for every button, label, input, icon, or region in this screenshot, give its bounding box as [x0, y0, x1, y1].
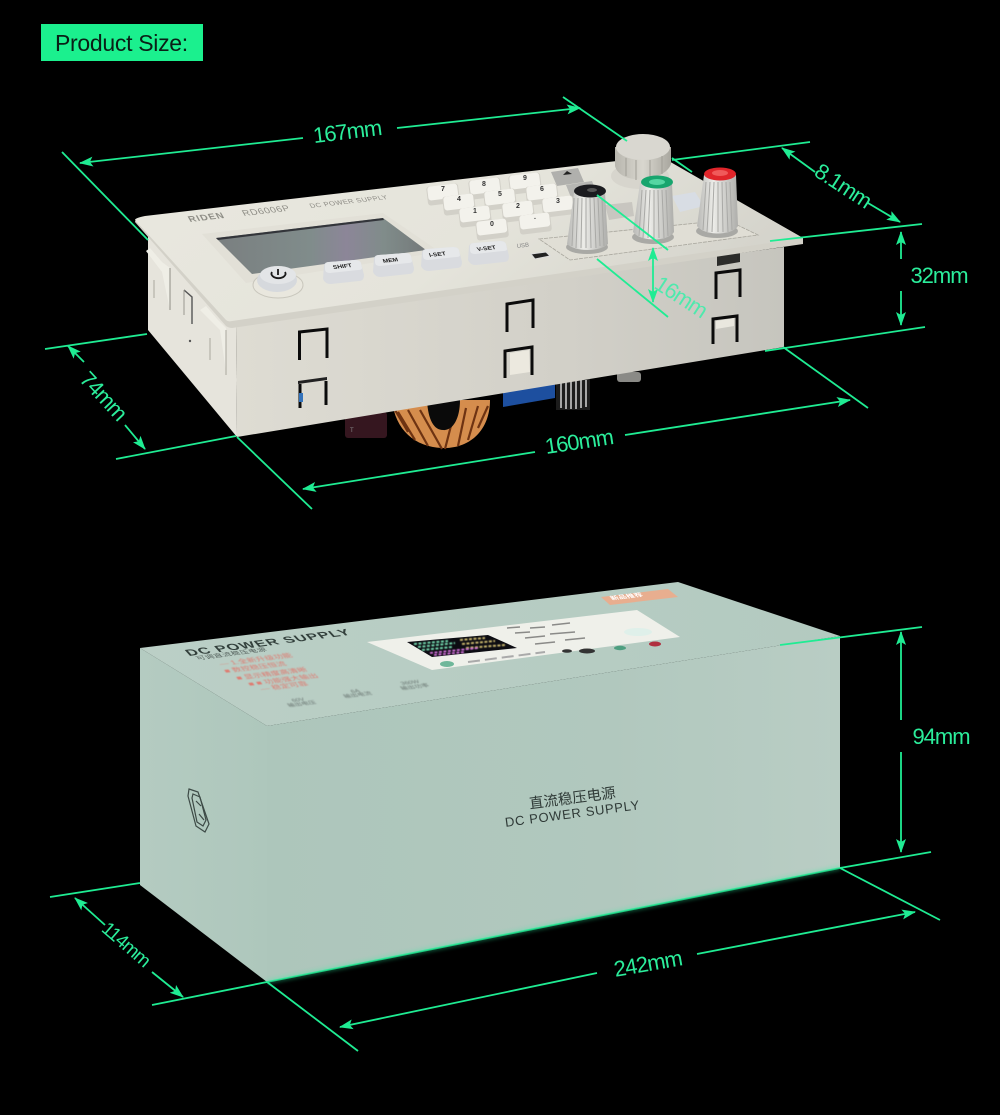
box front label: DC POWER SUPPLY [504, 797, 641, 830]
box top feature list: — 稳定可靠 [258, 680, 310, 692]
top plate [135, 157, 803, 328]
dimension: 114mm side: 114mm [97, 918, 154, 972]
keypad: 3 [556, 198, 560, 205]
dimension: 74mm side [45, 334, 236, 459]
keypad: 0 [490, 221, 494, 228]
function buttons: MEM [382, 258, 399, 265]
badge: Product Size heading [41, 24, 203, 61]
box top spec labels [285, 679, 431, 708]
box top feature list: — 1.全新升级功能 [217, 652, 294, 667]
green terminal [632, 176, 674, 244]
dimension: 167mm width [62, 97, 692, 240]
brand text: DC POWER SUPPLY [308, 194, 389, 210]
brand text: RIDEN [186, 211, 227, 225]
dimension: 16mm terminal offset [597, 195, 712, 323]
keypad: 6 [540, 186, 544, 193]
box top spec labels: 6A [349, 688, 362, 694]
dimension: 8.1mm depth: 8.1mm [810, 158, 876, 213]
dimension: 94mm height [780, 627, 970, 868]
box front label: 直流稳压电源 [528, 784, 617, 813]
keypad: 9 [523, 175, 527, 182]
power label key [672, 192, 704, 212]
function buttons: SHIFT [332, 264, 353, 271]
box top spec labels: 60V [290, 697, 307, 703]
dimension: 242mm length: 242mm [612, 945, 684, 982]
function buttons [323, 241, 509, 284]
product photo: power supply unit [135, 134, 803, 449]
keypad: . [534, 214, 536, 221]
display recess and screen [202, 213, 440, 283]
USB port [517, 243, 550, 259]
keypad: 5 [498, 191, 502, 198]
keypad [426, 168, 634, 241]
dimension: 160mm length [237, 347, 868, 509]
box top face [140, 582, 840, 726]
dimension: 160mm length: 160mm [543, 424, 615, 459]
orange corner sticker: 新品推荐 [608, 591, 645, 601]
keypad: 2 [516, 203, 520, 210]
dimension: 8.1mm depth [672, 142, 900, 222]
front side face [236, 247, 784, 437]
box top feature list: ■ ■ 功能强大输出 [246, 672, 320, 687]
brand text [186, 194, 389, 225]
dimension: 114mm side [50, 883, 267, 1005]
orange corner sticker [601, 589, 678, 605]
USB port: USB [517, 243, 529, 250]
package box [140, 582, 840, 982]
badge: Product Size heading: Product Size: [55, 30, 188, 56]
rotary knob [611, 134, 671, 189]
box top feature list: ■ 数控稳压恒流 [222, 660, 288, 674]
box top feature list: ■ 显示精度高清晰 [234, 666, 309, 681]
keypad: 7 [441, 186, 445, 193]
side logo on box [188, 789, 209, 832]
power button [253, 266, 303, 298]
box top printed title: DC POWER SUPPLY [182, 627, 354, 658]
dimension: 32mm height [765, 224, 968, 351]
box top product image [367, 610, 680, 670]
function buttons: I-SET [428, 252, 447, 259]
left side face with clips [146, 235, 237, 437]
dimension: 74mm side: 74mm [75, 366, 132, 425]
keypad: 4 [457, 196, 461, 203]
brand text: RD6006P [240, 204, 292, 219]
box top feature list [217, 652, 320, 692]
function buttons: V-SET [476, 246, 497, 253]
box front face [267, 636, 840, 982]
dimension: 16mm terminal offset: 16mm [650, 271, 712, 323]
keypad: 1 [473, 208, 477, 215]
dimension: 167mm width: 167mm [312, 115, 383, 148]
box top spec labels: 360W [399, 679, 421, 686]
black terminal [566, 184, 608, 254]
red terminal [696, 168, 738, 238]
dimension: 94mm height: 94mm [912, 724, 970, 749]
box top spec labels: 输出电压 [285, 699, 318, 708]
box left face [140, 648, 267, 982]
slots in front face [298, 252, 740, 408]
box top spec labels: 输出电流 [341, 690, 374, 699]
underside components [345, 372, 641, 449]
box top spec labels: 输出功率 [398, 682, 431, 691]
dimension: 32mm height: 32mm [910, 263, 968, 288]
dimension: 242mm length [267, 868, 940, 1051]
terminal panel outline [539, 220, 758, 260]
keypad: 8 [482, 181, 486, 188]
underside components: T [350, 428, 354, 434]
box top printed title: 可调直流稳压电源 [193, 646, 269, 661]
